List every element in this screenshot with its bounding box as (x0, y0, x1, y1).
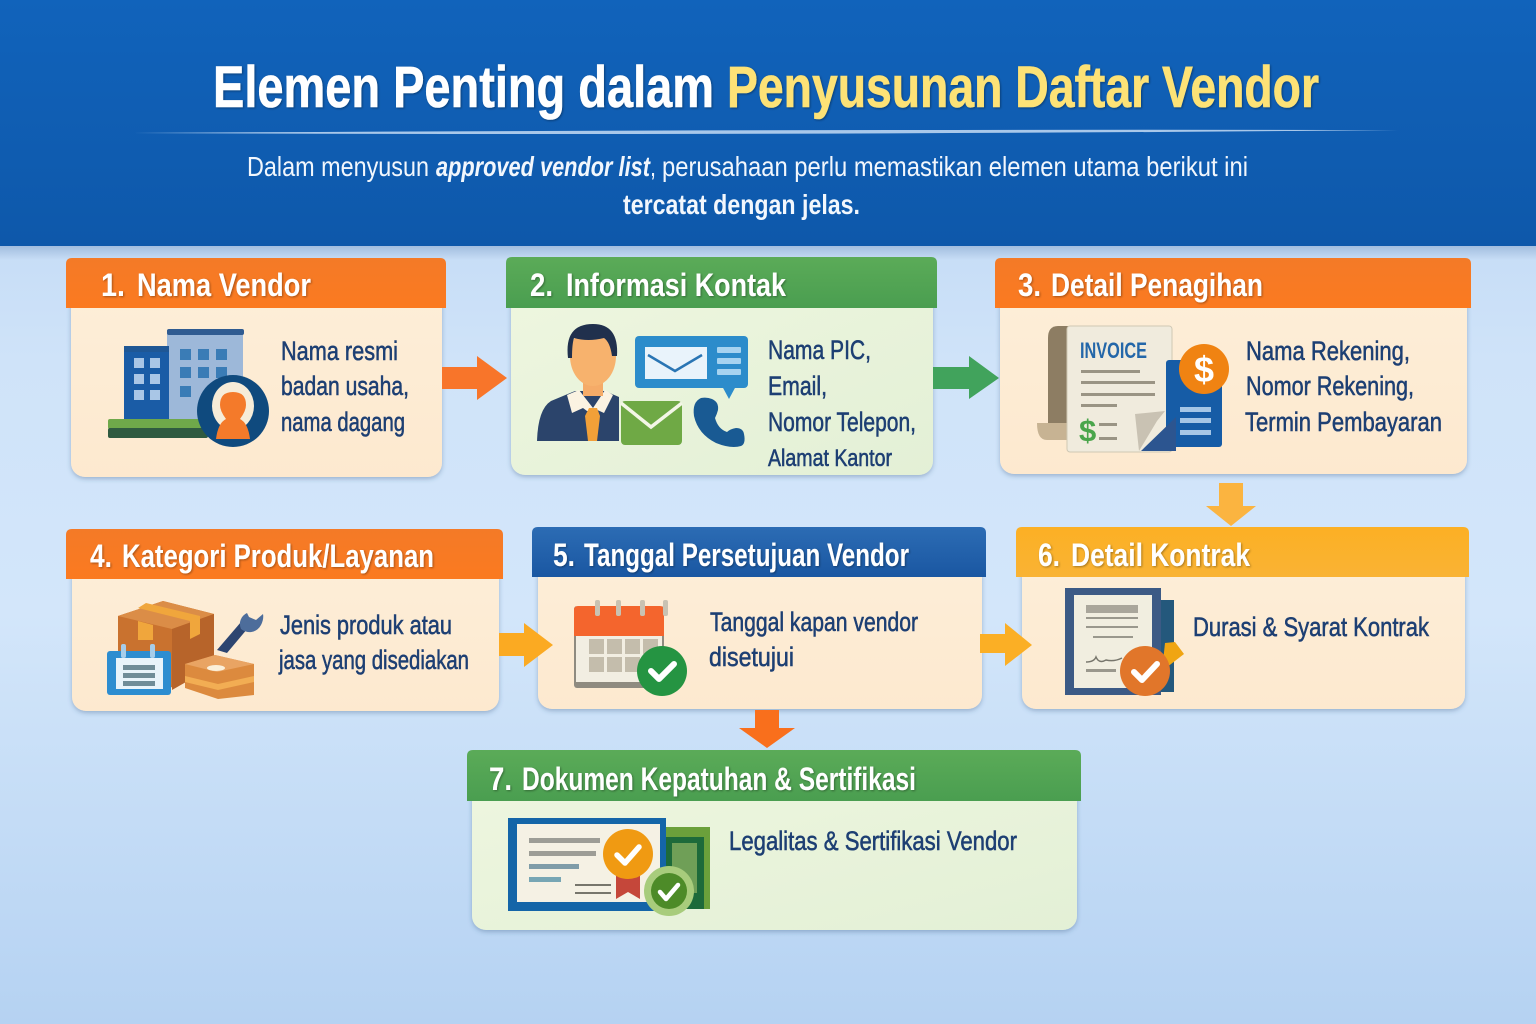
title: Penyusunan Daftar Vendor (727, 55, 1319, 120)
subtitle: approved vendor list (436, 151, 651, 182)
panel 4: Kategori Produk/Layanan (66, 529, 503, 711)
body text 4: Jenis produk atau (280, 610, 452, 640)
body text 3: Nomor Rekening, (1246, 371, 1414, 401)
body text 3: Termin Pembayaran (1245, 407, 1442, 437)
heading 6: 6. (1038, 537, 1060, 573)
body text 1: nama dagang (281, 407, 405, 437)
arrow 2 to 3 (933, 356, 999, 399)
icon: invoice and dollar: $ (1079, 413, 1096, 448)
panel 7: Dokumen Kepatuhan & Sertifikasi (467, 750, 1081, 930)
icon: invoice and dollar (1037, 326, 1229, 452)
arrow 1 to 2 (442, 356, 507, 400)
subtitle: tercatat dengan jelas. (623, 189, 860, 220)
heading 3: 3. (1018, 267, 1041, 303)
icon: invoice and dollar: $ (1194, 349, 1214, 390)
heading 5: 5. (553, 537, 575, 573)
subtitle (247, 151, 1248, 220)
body text 1 (281, 336, 409, 437)
body text 5: disetujui (709, 642, 794, 672)
icon: certificates with badges (508, 818, 710, 916)
heading 7: 7. (489, 761, 512, 797)
body text 4: jasa yang disediakan (278, 645, 469, 675)
body text 3: Nama Rekening, (1246, 336, 1410, 366)
heading 2: Informasi Kontak (566, 267, 786, 303)
body text 5 (709, 607, 918, 672)
panel 3: Detail Penagihan (995, 258, 1471, 474)
body text 6: Durasi & Syarat Kontrak (1193, 612, 1429, 642)
heading 6: Detail Kontrak (1071, 537, 1250, 573)
subtitle: perusahaan perlu memastikan elemen utama berikut ini (662, 151, 1248, 182)
panel 6: Detail Kontrak (1016, 527, 1469, 709)
title (213, 55, 1319, 120)
body text 2 (768, 335, 916, 472)
subtitle: Dalam menyusun (247, 151, 429, 182)
heading 1: Nama Vendor (137, 267, 311, 303)
body text 2: Nomor Telepon, (768, 407, 916, 437)
heading 5: Tanggal Persetujuan Vendor (584, 537, 909, 573)
icon: invoice and dollar: INVOICE (1080, 338, 1147, 363)
heading 4: 4. (90, 538, 112, 574)
heading 7: Dokumen Kepatuhan & Sertifikasi (522, 761, 916, 797)
body text 2: Alamat Kantor (768, 445, 892, 472)
panel 5: Tanggal Persetujuan Vendor (532, 527, 986, 709)
heading 4: Kategori Produk/Layanan (122, 538, 434, 574)
title: Elemen Penting dalam (213, 55, 714, 120)
arrow 5 to 7 (739, 710, 795, 748)
icon: boxes, wrench, clipboard (107, 601, 263, 699)
body text 1: Nama resmi (281, 336, 398, 366)
body text 2: Nama PIC, (768, 335, 871, 365)
icon: calendar with check (574, 600, 687, 696)
heading 1: 1. (101, 267, 125, 303)
panel 2: Informasi Kontak (506, 257, 937, 475)
body text 7: Legalitas & Sertifikasi Vendor (729, 826, 1017, 856)
arrow 5 to 6 (980, 623, 1032, 666)
arrow 3 to 6 (1206, 483, 1256, 526)
arrow 4 to 5 (499, 623, 553, 667)
body text 2: Email, (768, 371, 827, 401)
icon: building with person (108, 329, 269, 447)
panel 1: Nama Vendor (66, 258, 446, 477)
heading 2: 2. (530, 267, 553, 303)
body text 1: badan usaha, (281, 371, 409, 401)
header band (0, 0, 1536, 246)
heading 3: Detail Penagihan (1051, 267, 1263, 303)
body text 3 (1245, 336, 1442, 437)
body text 5: Tanggal kapan vendor (710, 607, 918, 637)
body text 4 (278, 610, 469, 675)
icon: contact person, envelope, phone (537, 324, 748, 447)
icon: contract with seal (1065, 588, 1184, 696)
subtitle: , (650, 151, 656, 182)
